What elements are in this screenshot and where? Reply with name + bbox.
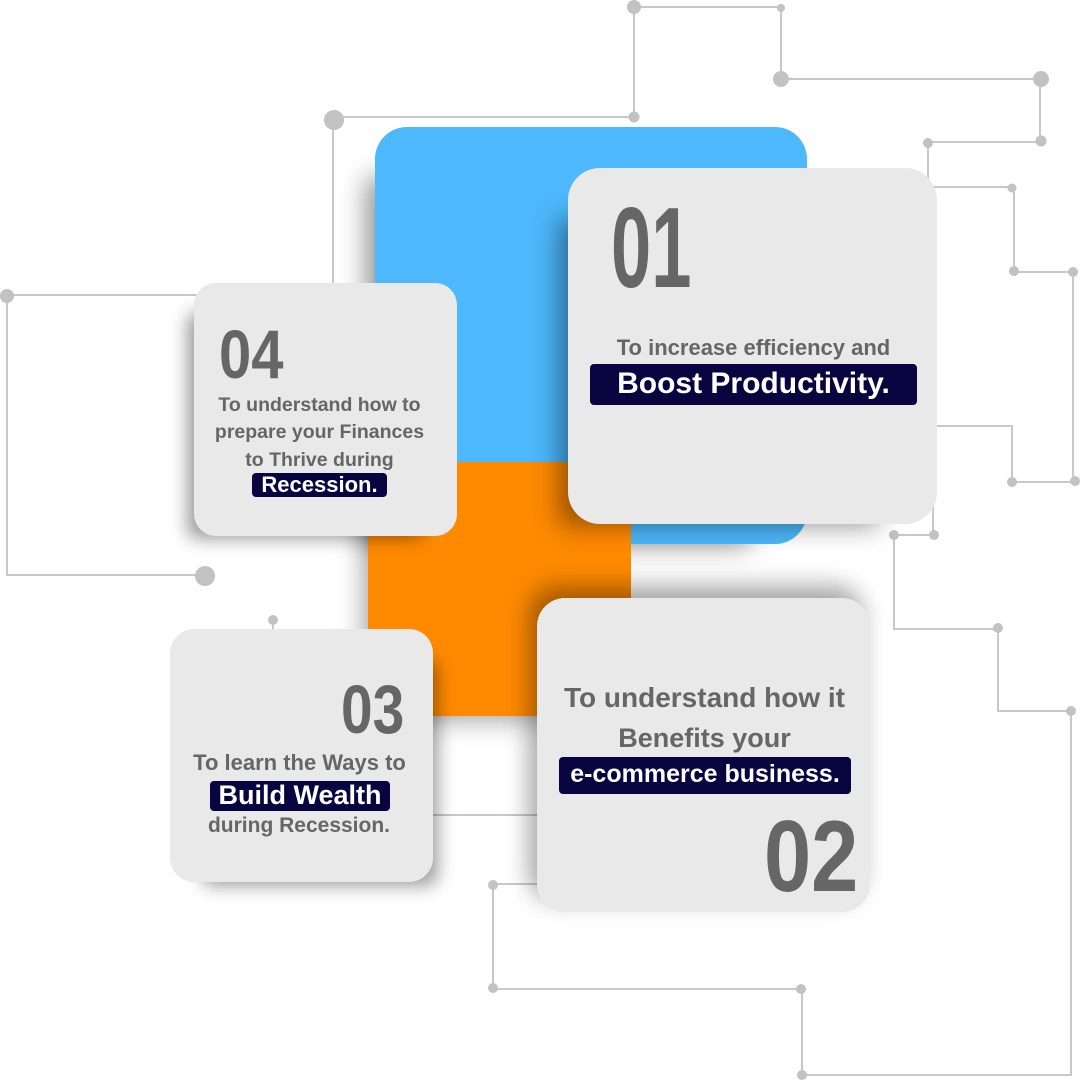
number 04: 04 — [218, 316, 283, 393]
card 04 — [194, 283, 457, 536]
card 02 text — [564, 682, 845, 753]
orange square — [368, 462, 631, 716]
card 02 — [537, 598, 870, 912]
card 04 text: prepare your Finances — [215, 421, 424, 443]
card 01 text: To increase efficiency and — [617, 335, 890, 360]
number 02: 02 — [764, 800, 858, 912]
card 02 highlight — [559, 757, 851, 794]
number 01: 01 — [610, 184, 691, 312]
card 01 — [568, 168, 937, 524]
card 03 text bottom: during Recession. — [208, 814, 390, 837]
blue square — [375, 127, 807, 544]
card 04 text: to Thrive during — [245, 448, 394, 470]
card 01 highlight: Boost Productivity. — [617, 367, 890, 400]
card 03 — [170, 629, 433, 882]
card 04 highlight: Recession. — [261, 472, 378, 497]
card 02 highlight: e-commerce business. — [570, 760, 840, 788]
card 03 text top: To learn the Ways to — [193, 750, 406, 775]
card 02 text: Benefits your — [618, 723, 791, 753]
card 04 text — [215, 394, 424, 470]
card 02 text: To understand how it — [564, 682, 845, 713]
card 03 highlight: Build Wealth — [218, 780, 382, 810]
card 01 highlight — [590, 364, 917, 405]
number 03: 03 — [340, 671, 404, 748]
card 04 text: To understand how to — [218, 394, 421, 416]
